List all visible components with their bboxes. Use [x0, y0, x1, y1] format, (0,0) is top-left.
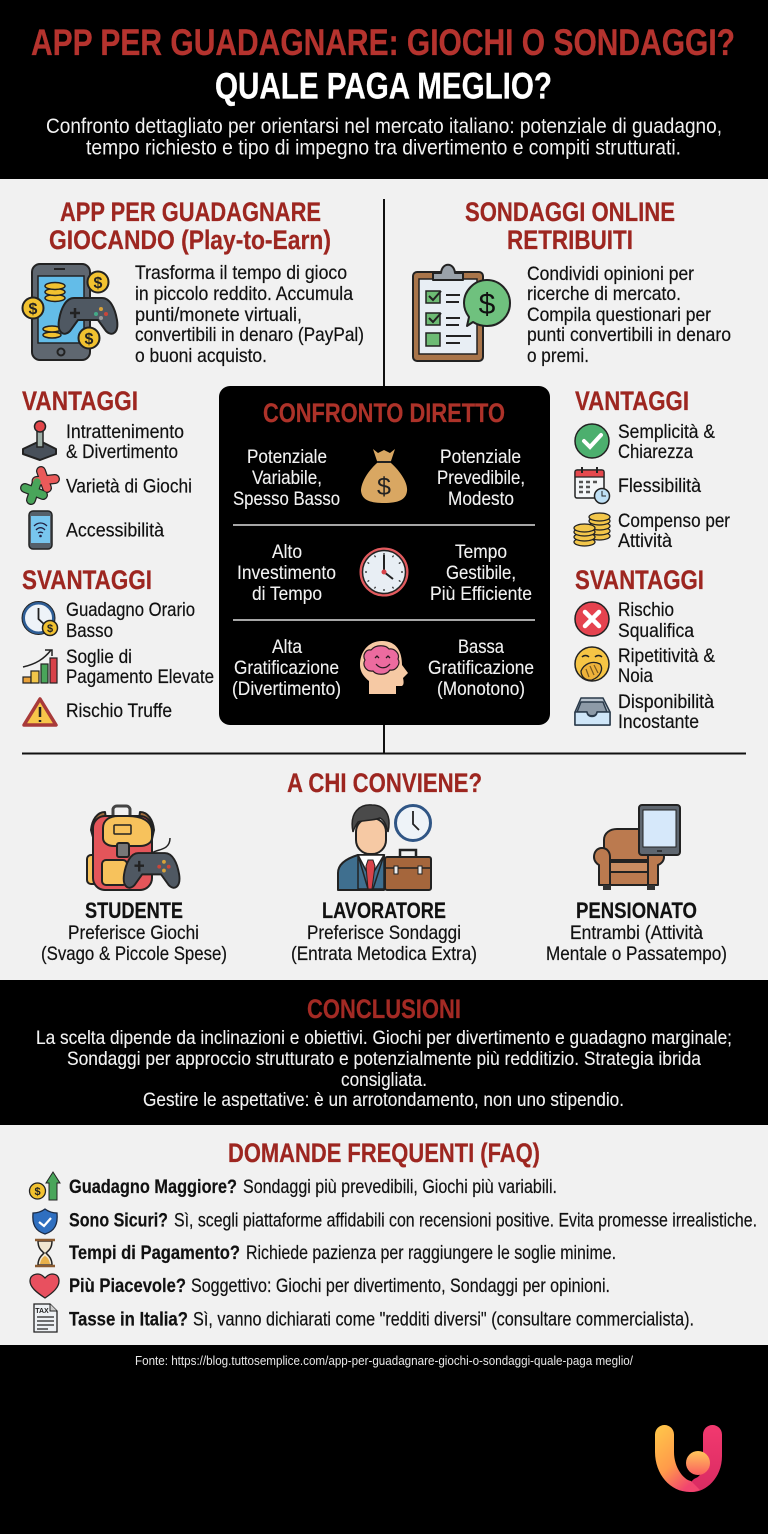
subtitle: tempo richiesto e tipo di impegno tra divertimento e compiti strutturati. [86, 136, 681, 160]
icon: warning [24, 699, 56, 725]
faq: guadagno maggiore: Sondaggi più prevedibili, Giochi più variabili. [243, 1176, 557, 1198]
text: gratificazione sondaggi: (Monotono) [437, 678, 525, 700]
faq: tempi di pagamento [69, 1242, 616, 1264]
text: disponibilità: Incostante [618, 711, 699, 733]
icon: heart [30, 1274, 59, 1298]
text: compenso [618, 510, 730, 552]
icon: x circle [575, 602, 609, 636]
text: potenziale sondaggi: Modesto [448, 488, 514, 510]
text: rischio truffe: Rischio Truffe [66, 700, 172, 722]
text: lavoratore: (Entrata Metodica Extra) [291, 943, 477, 965]
icon: bar chart with arrow [23, 650, 57, 683]
persona: studente [41, 806, 227, 965]
text: pensionato [546, 922, 727, 965]
row: tempo [237, 541, 532, 605]
icon: clipboard with speech bubble: $ [479, 288, 496, 321]
text: soglie: Pagamento Elevate [66, 666, 214, 688]
text: gratificazione sondaggi: Bassa [458, 636, 504, 658]
panel: faq [30, 1138, 757, 1332]
text: tempo sondaggi [430, 541, 532, 605]
heading: app per guadagnare giocando [49, 197, 331, 255]
text: studente: Preferisce Giochi [68, 922, 199, 944]
text: tempo sondaggi: Tempo [455, 541, 507, 563]
heading: vantaggi sondaggi: VANTAGGI [575, 386, 689, 416]
text: tempo giochi: di Tempo [252, 583, 322, 605]
faq: sono sicuri: Sono Sicuri? [69, 1210, 168, 1232]
description: giochi: convertibili in denaro (PayPal) [135, 324, 364, 346]
icon: check circle [575, 424, 609, 458]
text: guadagno orario [66, 599, 195, 642]
icon: shield [33, 1209, 57, 1234]
text: tempo giochi: Investimento [237, 562, 336, 584]
icon: phone with coins and gamepad [22, 264, 117, 360]
text: potenziale giochi: Variabile, [252, 467, 322, 489]
heading: sondaggi online retribuiti: SONDAGGI ONLINE [465, 197, 675, 227]
text: pensionato: Mentale o Passatempo) [546, 943, 727, 965]
description: sondaggi: Condividi opinioni per [527, 263, 694, 285]
panel: a chi conviene [41, 768, 727, 965]
text: tempo giochi [237, 541, 336, 605]
text: disponibilità [618, 691, 714, 733]
icon: phone with coins and gamepad: $ [29, 301, 38, 318]
text: gratificazione giochi: Alta [272, 636, 302, 658]
icon: yawning face [575, 647, 609, 681]
heading: app per guadagnare giocando: APP PER GUADAGNARE [60, 197, 321, 227]
text: gratificazione giochi [232, 636, 341, 700]
icon: calendar with clock [575, 467, 610, 504]
text: intrattenimento [66, 421, 184, 463]
text: potenziale giochi: Spesso Basso [233, 488, 340, 510]
icon: phone with coins and gamepad: $ [94, 275, 103, 292]
icon: coin stacks [574, 513, 610, 546]
text: potenziale giochi: Potenziale [247, 446, 327, 468]
text: studente [41, 922, 227, 965]
faq: tasse in italia: Tasse in Italia? [69, 1308, 188, 1330]
text: gratificazione giochi: Gratificazione [234, 657, 339, 679]
panel: header [0, 0, 768, 179]
text: studente: (Svago & Piccole Spese) [41, 943, 227, 965]
description: giochi: Trasforma il tempo di gioco [135, 262, 347, 284]
icon: armchair with tablet [594, 805, 680, 890]
source line: Fonte: https://blog.tuttosemplice.com/app-per-guadagnare-giochi-o-sondaggi-quale-paga meglio/ [135, 1353, 633, 1368]
text: pensionato: Entrambi (Attività [570, 922, 703, 944]
icon: money bag [361, 449, 407, 503]
text: potenziale sondaggi: Potenziale [440, 446, 521, 468]
faq: guadagno maggiore: Guadagno Maggiore? [69, 1176, 237, 1198]
row: potenziale [233, 446, 525, 510]
heading: sondaggi online retribuiti [465, 197, 675, 255]
text: potenziale giochi [233, 446, 340, 510]
heading: svantaggi giochi: SVANTAGGI [22, 565, 152, 595]
description: sondaggi: o premi. [527, 345, 589, 367]
label: studente: STUDENTE [85, 898, 183, 923]
text: compenso: Compenso per [618, 510, 730, 532]
text: ripetitività [618, 645, 715, 687]
description: sondaggi: punti convertibili in denaro [527, 324, 731, 346]
heading: domande frequenti: DOMANDE FREQUENTI (FAQ) [228, 1138, 540, 1168]
description: giochi: o buoni acquisto. [135, 345, 267, 367]
persona: lavoratore [291, 805, 477, 965]
text: conclusioni: Sondaggi per approccio strutturato e potenzialmente più redditizio. Strategia ibrida [67, 1048, 701, 1070]
icon: clock with coin: $ [47, 623, 53, 635]
text: semplicità [618, 421, 715, 463]
text: rischio squalifica: Rischio [618, 599, 674, 621]
panel: footer [0, 1345, 768, 1534]
heading: confronto diretto: CONFRONTO DIRETTO [263, 398, 505, 428]
text: soglie: Soglie di [66, 646, 132, 668]
heading: sondaggi online retribuiti: RETRIBUITI [507, 225, 633, 255]
heading: vantaggi giochi: VANTAGGI [22, 386, 138, 416]
text: lavoratore [291, 922, 477, 965]
text: tempo sondaggi: Più Efficiente [430, 583, 532, 605]
text: ripetitività: Noia [618, 665, 653, 687]
icon: clock with coin [22, 602, 58, 636]
text: ripetitività: Ripetitività & [618, 645, 715, 667]
icon: tax document: TAX [35, 1308, 49, 1315]
label: pensionato: PENSIONATO [576, 898, 697, 923]
heading: a chi conviene: A CHI CONVIENE? [287, 768, 482, 798]
icon: hourglass [35, 1240, 55, 1266]
description: sondaggi [527, 263, 731, 367]
center vertical divider [22, 199, 746, 754]
faq: più piacevole [69, 1275, 610, 1297]
text: rischio squalifica: Squalifica [618, 620, 694, 642]
heading: conclusioni: CONCLUSIONI [307, 994, 461, 1024]
persona: pensionato [546, 805, 727, 965]
text: potenziale sondaggi: Prevedibile, [437, 467, 525, 489]
panel: giochi [22, 197, 364, 725]
text: tempo sondaggi: Gestibile, [446, 562, 516, 584]
icon: money bag: $ [377, 473, 391, 501]
text: guadagno orario: Guadagno Orario [66, 599, 195, 621]
row: gratificazione [232, 636, 534, 700]
text: intrattenimento: & Divertimento [66, 441, 178, 463]
text: disponibilità: Disponibilità [618, 691, 714, 713]
subtitle [46, 115, 722, 160]
label: lavoratore: LAVORATORE [322, 898, 446, 923]
text: semplicità: Chiarezza [618, 441, 693, 463]
logo [655, 1425, 722, 1492]
icon: worker with clock and briefcase [338, 805, 431, 890]
text: gratificazione sondaggi [428, 636, 534, 700]
icon: joystick [23, 421, 56, 460]
text: intrattenimento: Intrattenimento [66, 421, 184, 443]
heading: app per guadagnare giocando: GIOCANDO (Play-to-Earn) [49, 225, 331, 255]
text: conclusioni: Gestire le aspettative: è un arrotondamento, non uno stipendio. [143, 1089, 624, 1111]
text: soglie [66, 646, 214, 688]
text: potenziale sondaggi [437, 446, 525, 510]
text: tempo giochi: Alto [272, 541, 302, 563]
icon: phone wifi [29, 511, 52, 549]
icon: coin and up arrow [30, 1172, 60, 1200]
icon: coin and up arrow: $ [34, 1186, 41, 1198]
text: varietà: Varietà di Giochi [66, 476, 192, 498]
icon: phone with coins and gamepad: $ [85, 331, 94, 348]
faq: guadagno maggiore [69, 1176, 557, 1198]
faq: più piacevole: Più Piacevole? [69, 1275, 186, 1297]
text: gratificazione sondaggi: Gratificazione [428, 657, 534, 679]
panel: confronto diretto [219, 386, 550, 725]
icon: tax document [34, 1304, 57, 1332]
text: semplicità: Semplicità & [618, 421, 715, 443]
faq: tempi di pagamento: Tempi di Pagamento? [69, 1242, 240, 1264]
heading: svantaggi sondaggi: SVANTAGGI [575, 565, 704, 595]
text: compenso: Attività [618, 530, 672, 552]
icon: empty inbox [575, 698, 610, 725]
text: gratificazione giochi: (Divertimento) [232, 678, 341, 700]
icon: clock [361, 549, 407, 595]
faq: più piacevole: Soggettivo: Giochi per divertimento, Sondaggi per opinioni. [191, 1275, 610, 1297]
icon: puzzle [25, 471, 55, 500]
description: giochi [135, 262, 364, 367]
text: conclusioni: consigliata. [341, 1069, 427, 1091]
description: giochi: in piccolo reddito. Accumula [135, 283, 353, 305]
text: guadagno orario: Basso [66, 620, 113, 642]
icon: backpack and gamepad [87, 806, 179, 890]
title: QUALE PAGA MEGLIO? [215, 66, 552, 106]
description: sondaggi: ricerche di mercato. [527, 283, 681, 305]
text: conclusioni [36, 1027, 732, 1111]
description: sondaggi: Compila questionari per [527, 304, 711, 326]
text: flessibilità: Flessibilità [618, 475, 701, 497]
icon: head with smiling brain [360, 641, 408, 694]
panel: conclusioni [0, 980, 768, 1125]
text: rischio squalifica [618, 599, 694, 642]
icon: clipboard with speech bubble [413, 265, 510, 361]
faq: tempi di pagamento: Richiede pazienza per raggiungere le soglie minime. [246, 1242, 616, 1264]
text: accessibilità: Accessibilità [66, 520, 164, 542]
title [31, 22, 735, 106]
description: giochi: punti/monete virtuali, [135, 304, 302, 326]
panel: sondaggi [413, 197, 731, 733]
text: lavoratore: Preferisce Sondaggi [307, 922, 461, 944]
